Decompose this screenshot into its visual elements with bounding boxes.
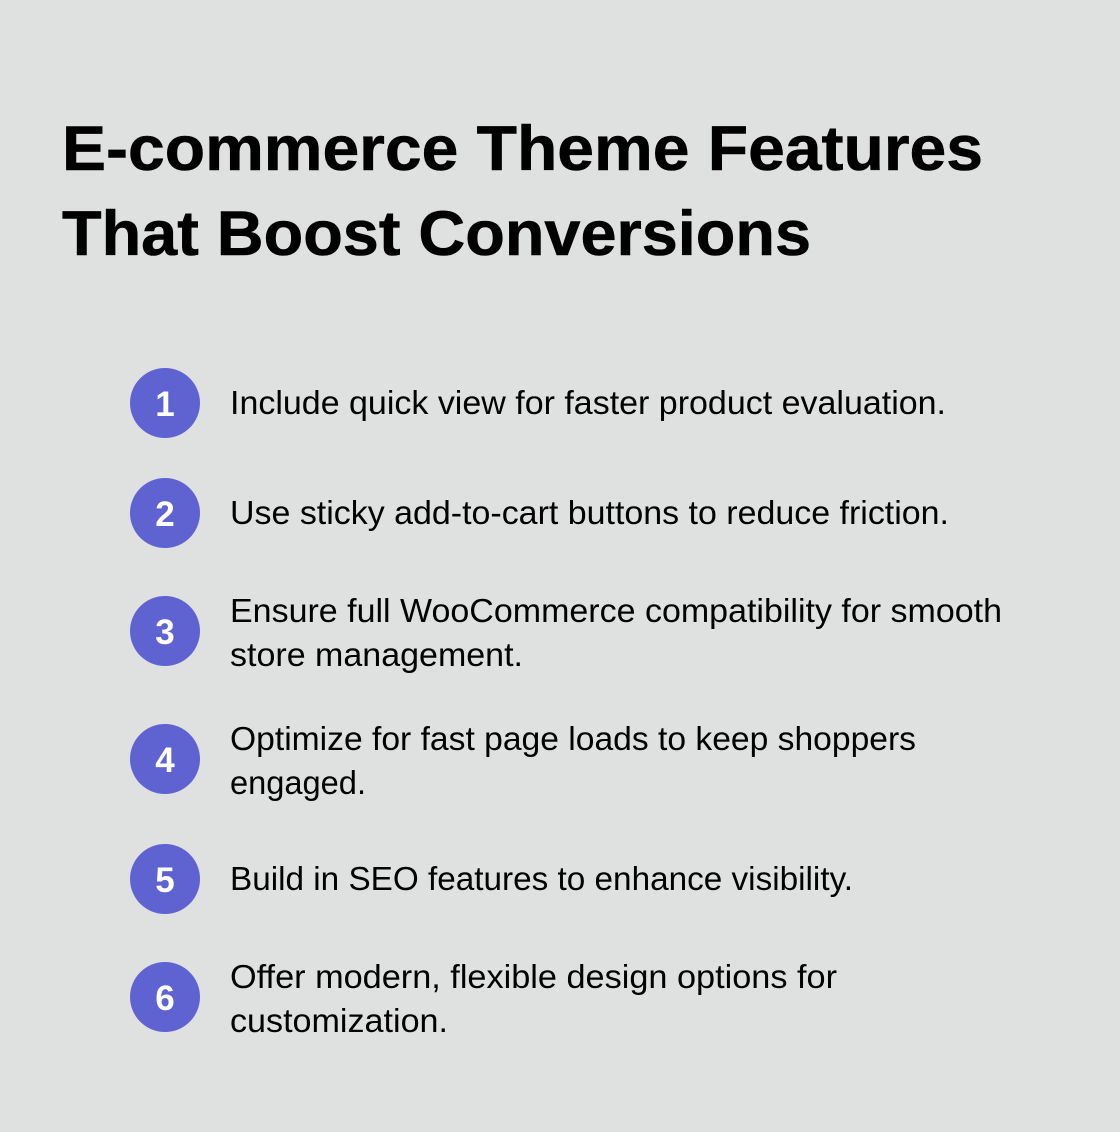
step 2: [130, 478, 949, 548]
step 4 text: engaged.: [230, 764, 366, 801]
step 1 badge: 1: [155, 385, 175, 424]
step 4 badge: 4: [155, 741, 175, 780]
step 4 text: [230, 720, 916, 801]
title: E-commerce Theme Features: [62, 114, 983, 184]
step 6 text: customization.: [230, 1002, 448, 1039]
step 5 text: Build in SEO features to enhance visibility.: [230, 860, 853, 897]
step 3 text: [230, 592, 1002, 673]
step 1 text: Include quick view for faster product evaluation.: [230, 384, 946, 421]
step 4: [130, 720, 916, 801]
step 6 badge: 6: [155, 979, 175, 1018]
title: That Boost Conversions: [62, 199, 811, 269]
step 2 badge: 2: [155, 495, 175, 534]
step 5: [130, 844, 853, 914]
step 3 text: store management.: [230, 636, 523, 673]
step 6: [130, 958, 837, 1039]
step 5 badge: 5: [155, 861, 175, 900]
step 1 badge: [130, 368, 200, 438]
step 3 text: Ensure full WooCommerce compatibility for smooth: [230, 592, 1002, 629]
step 6 text: [230, 958, 837, 1039]
step 3 badge: [130, 596, 200, 666]
step 4 badge: [130, 724, 200, 794]
step 4 text: Optimize for fast page loads to keep shoppers: [230, 720, 916, 757]
step 6 badge: [130, 962, 200, 1032]
title: [62, 114, 983, 269]
step 3 badge: 3: [155, 613, 175, 652]
step 6 text: Offer modern, flexible design options for: [230, 958, 837, 995]
step 3: [130, 592, 1002, 673]
step 2 text: Use sticky add-to-cart buttons to reduce friction.: [230, 494, 949, 531]
step 5 badge: [130, 844, 200, 914]
step 2 badge: [130, 478, 200, 548]
step 1: [130, 368, 946, 438]
